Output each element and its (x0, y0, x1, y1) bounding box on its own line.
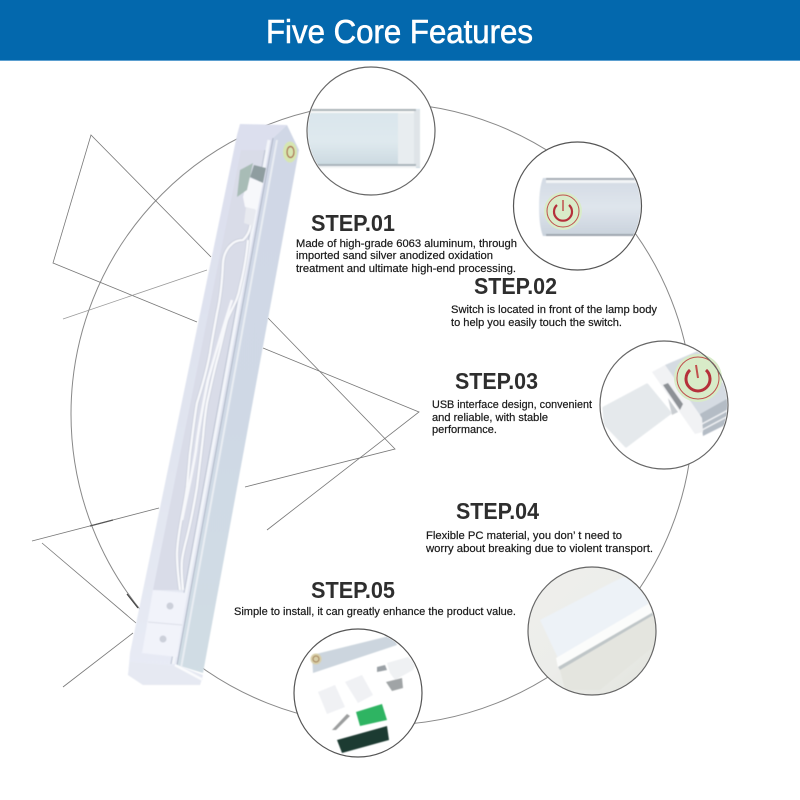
lamp end cap (128, 662, 203, 685)
step 2 text: to help you easily touch the switch. (451, 317, 622, 329)
lamp touch switch (283, 142, 297, 162)
header banner (0, 0, 800, 61)
step 4 text (425, 498, 653, 555)
step 5 text: STEP.05 (311, 577, 395, 603)
USB cable and plug (387, 657, 416, 680)
decorative geometric lines and orbit circle (32, 103, 693, 725)
step 5 text (234, 577, 516, 618)
lamp right face (177, 125, 299, 673)
step 1 text: Made of high-grade 6063 aluminum, through (296, 238, 517, 250)
coiled USB cable (177, 222, 251, 590)
green adapter (356, 704, 387, 726)
step 3 text: and reliable, with stable (432, 412, 548, 424)
lamp strip (312, 635, 397, 673)
circle 5: accessories detail (294, 629, 422, 757)
circle 3: USB interface detail (600, 341, 735, 469)
USB plug in case (243, 177, 263, 210)
step 4 text: Flexible PC material, you don’ t need to (426, 530, 622, 542)
mounting brackets in case (142, 590, 187, 657)
step 5 text: Simple to install, it can greatly enhance the product value. (234, 606, 516, 618)
step 4 text: worry about breaking due to violent transport. (425, 543, 653, 555)
power button (544, 192, 582, 230)
step 3 text (432, 368, 592, 436)
power button (674, 354, 722, 402)
mounting clips (318, 685, 345, 714)
black adhesive pad (337, 726, 389, 753)
step 3 text: STEP.03 (455, 368, 538, 394)
lamp rail highlights (177, 138, 273, 665)
circle 2: touch switch detail (514, 142, 650, 270)
screw (332, 714, 350, 730)
circle 4: flexible PC diffuser detail (528, 560, 662, 695)
lamp inner tray (153, 150, 268, 590)
lamp product in transparent case (128, 124, 299, 685)
lamp left face (128, 124, 287, 685)
step 2 text: STEP.02 (474, 273, 557, 299)
title: Five Core Features (266, 13, 533, 50)
step 1 text (296, 210, 517, 275)
step 1 text: STEP.01 (311, 210, 395, 236)
step 1 text: imported sand silver anodized oxidation (296, 250, 493, 262)
step 4 text: STEP.04 (456, 498, 539, 524)
circle 1: aluminum profile detail (300, 67, 435, 195)
step 3 text: USB interface design, convenient (432, 399, 592, 411)
step 2 text: Switch is located in front of the lamp body (451, 304, 658, 316)
step 3 text: performance. (432, 424, 497, 436)
step 1 text: treatment and ultimate high-end processing. (296, 263, 516, 275)
step 2 text (451, 273, 658, 329)
